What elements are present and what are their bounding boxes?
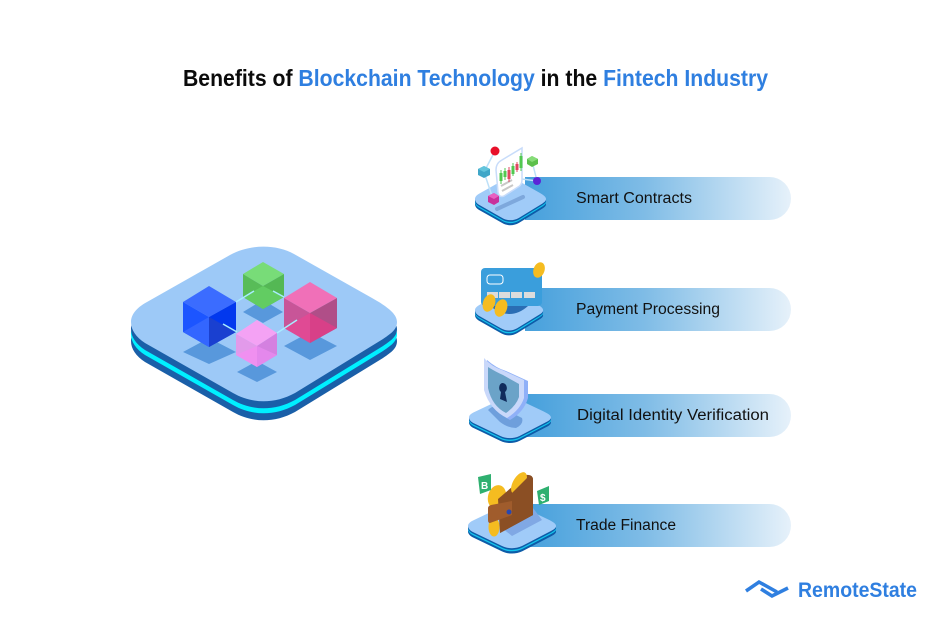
cube: green xyxy=(243,262,284,309)
node: purple xyxy=(533,177,541,185)
wordmark: RemoteState xyxy=(798,579,917,602)
label: Smart Contracts xyxy=(576,190,692,207)
icon: wallet with coins: B xyxy=(481,481,488,492)
bar xyxy=(525,504,791,547)
icon: wallet with coins: $ xyxy=(540,493,546,504)
cube: light violet xyxy=(236,320,277,367)
icon: logo mark xyxy=(746,582,788,596)
cube shadows xyxy=(183,300,337,382)
cube: blue xyxy=(183,286,236,347)
node: red xyxy=(490,146,500,156)
row 1: smart contracts xyxy=(475,146,791,225)
node: green cube xyxy=(527,156,538,167)
platform base xyxy=(131,247,397,420)
bar xyxy=(525,288,791,331)
label: Trade Finance xyxy=(576,517,676,534)
logo: RemoteState xyxy=(746,579,917,602)
icon: shield with keyhole on platform xyxy=(469,358,551,443)
bar xyxy=(525,394,791,437)
bar xyxy=(525,177,791,220)
row 4: trade finance xyxy=(468,470,791,554)
row 2: payment processing xyxy=(475,261,791,335)
icon: contract chart on platform xyxy=(475,146,546,225)
icon: wallet with coins xyxy=(468,470,556,554)
icon: credit card with coins xyxy=(475,261,547,335)
row 3: digital identity verification xyxy=(469,358,791,443)
title: Benefits of Blockchain Technology in the Fintech Industry xyxy=(183,65,768,91)
main illustration: blockchain platform xyxy=(131,247,397,420)
label: Payment Processing xyxy=(576,301,720,318)
node: cyan cube xyxy=(478,166,490,178)
label: Digital Identity Verification xyxy=(577,407,769,424)
cube: pink xyxy=(284,282,337,343)
node: magenta cube xyxy=(488,193,499,205)
connector lines xyxy=(223,291,297,333)
